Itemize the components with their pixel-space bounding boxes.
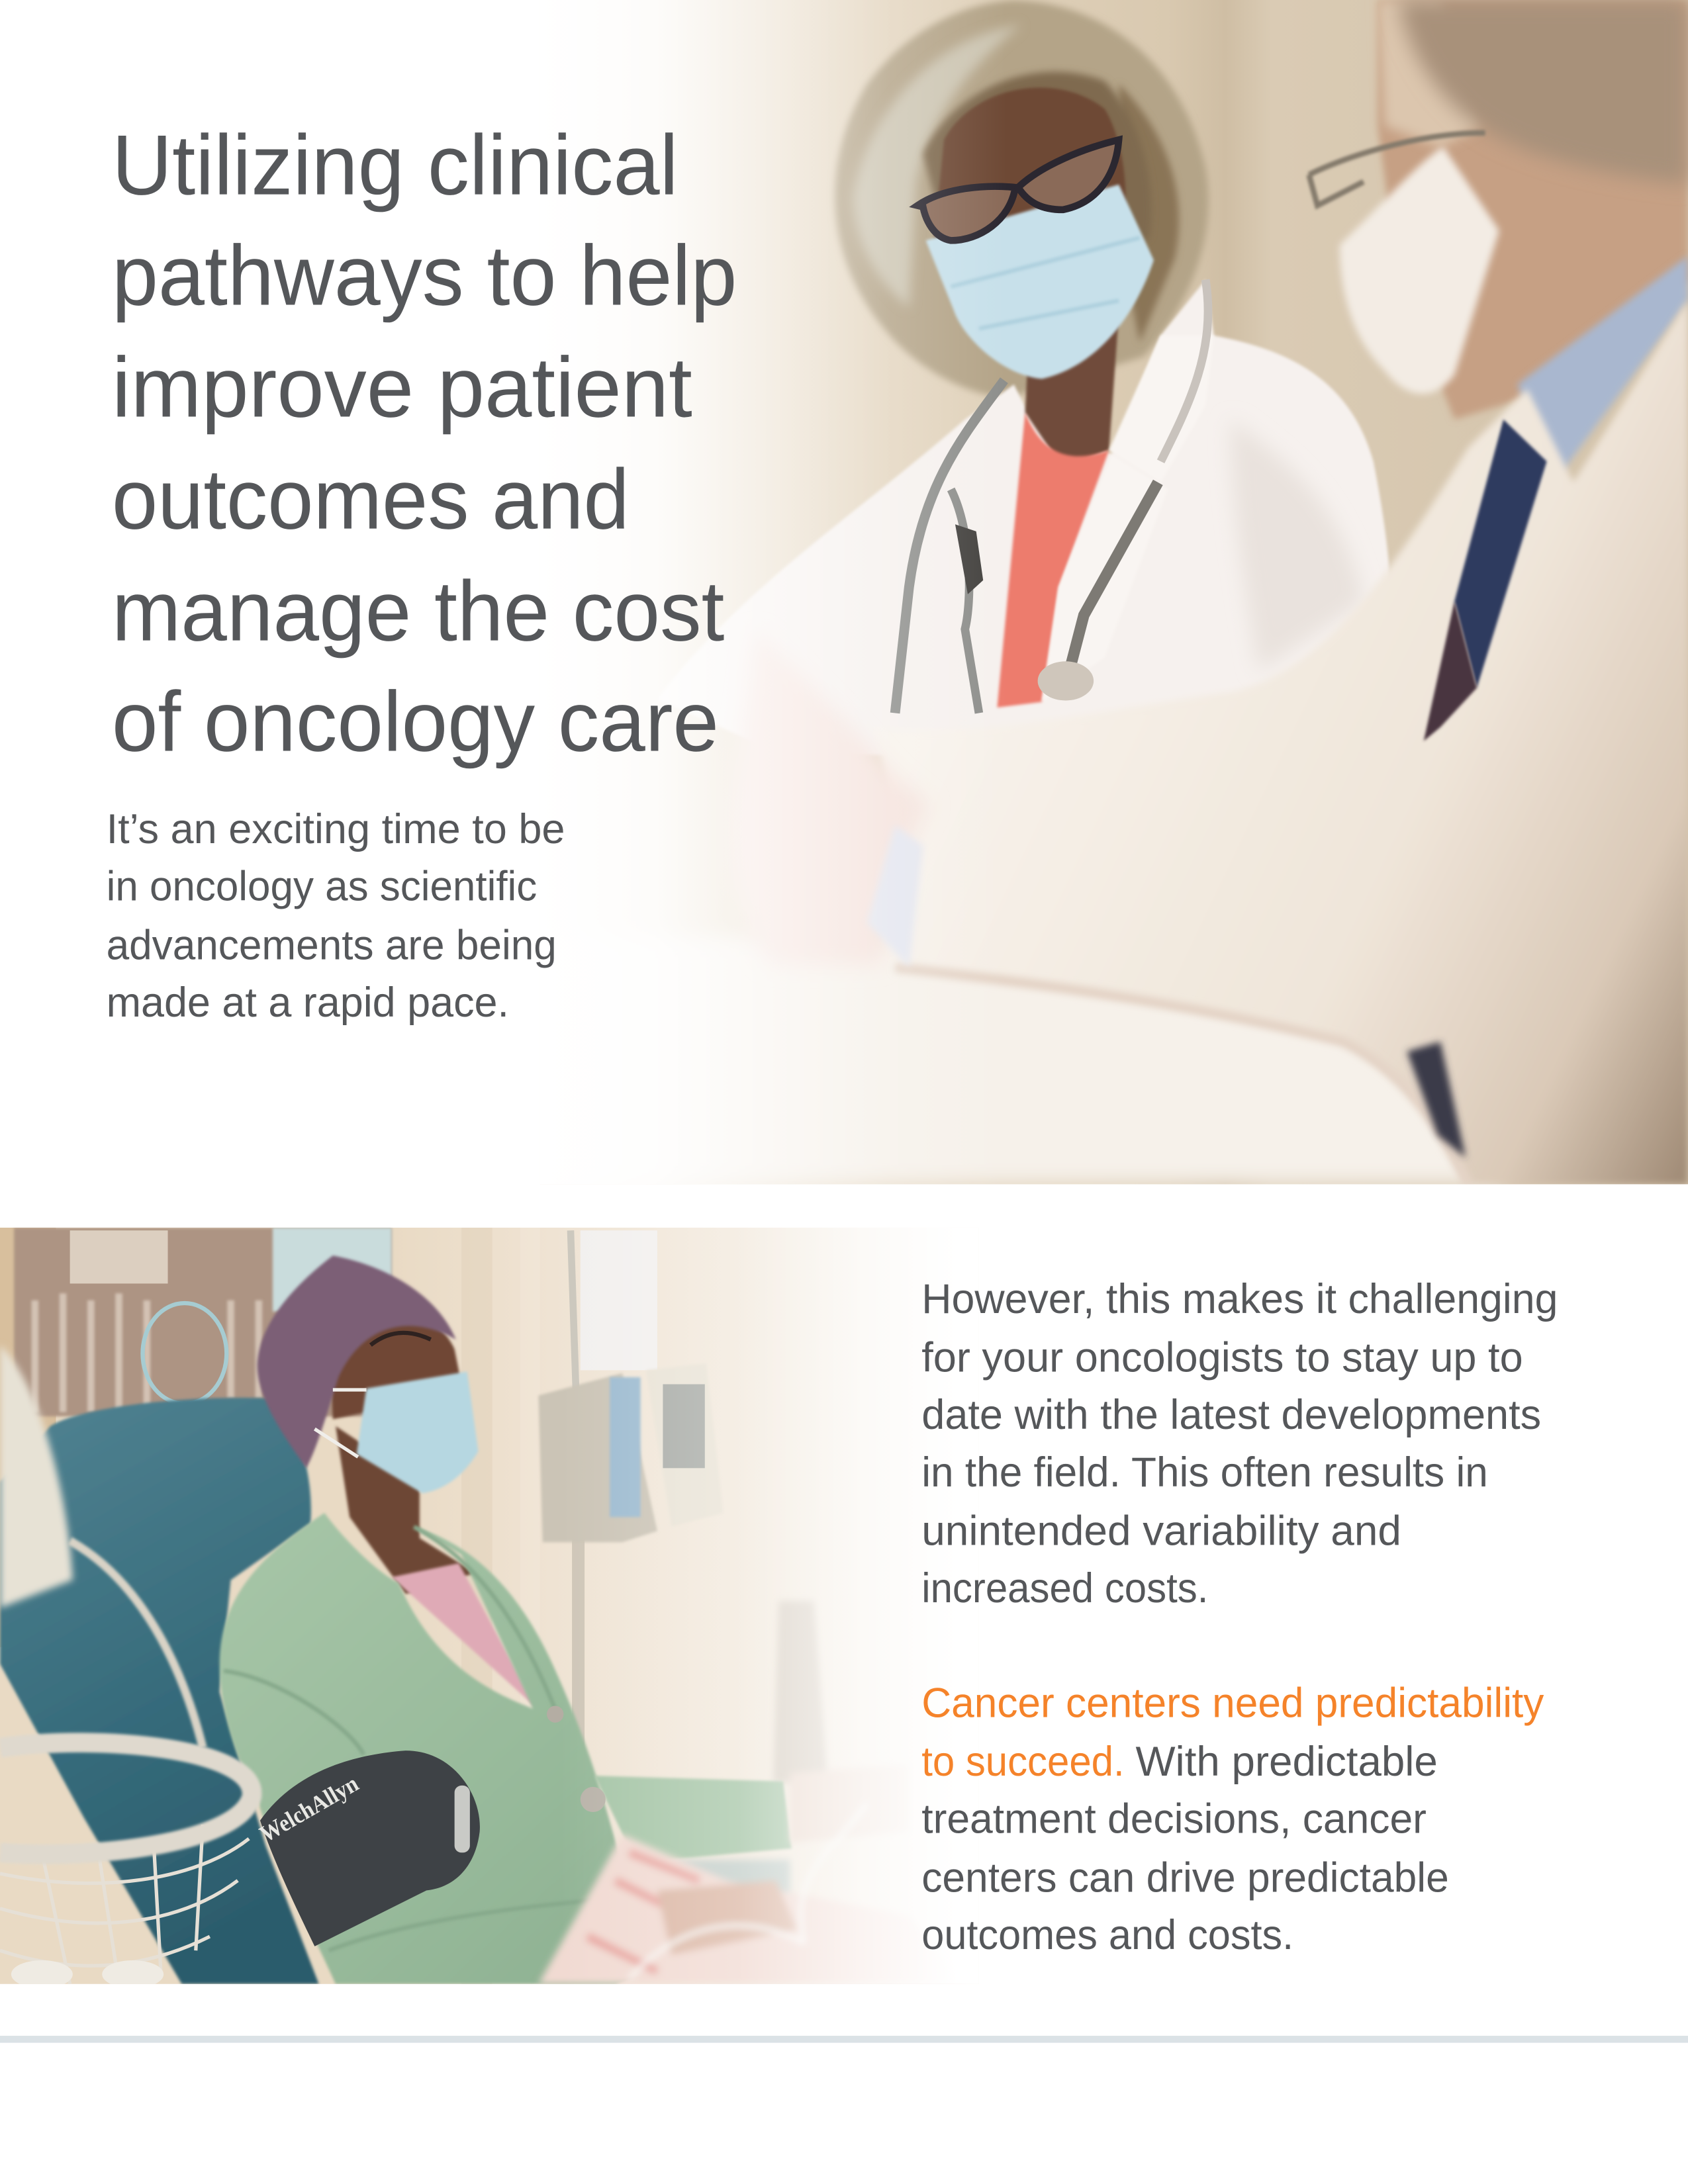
necktie [1454, 420, 1547, 688]
coat and sleeve [874, 300, 1688, 1184]
blood pressure cuff [255, 1751, 480, 1946]
lab coat [657, 280, 1393, 755]
infusion pump [538, 1363, 723, 1542]
hair behind face [919, 68, 1149, 236]
hand [657, 1881, 797, 1955]
glasses [1309, 133, 1485, 206]
title: outcomes and [112, 452, 630, 547]
hair [835, 0, 1209, 398]
woman doctor [657, 0, 1393, 755]
cuff body [260, 1751, 480, 1946]
armrest lamp [0, 1345, 73, 1608]
necktie end under arm [1407, 1042, 1466, 1158]
left wall [0, 1228, 56, 1647]
body text: challenge: increased costs. [921, 1565, 1208, 1612]
table [532, 936, 1503, 1184]
tubing [630, 1803, 867, 1978]
neck [336, 1426, 475, 1594]
picture sky [273, 1228, 392, 1312]
wire basket [0, 1743, 252, 1988]
intro text: made at a rapid pace. [107, 979, 509, 1026]
sleeve shadow edge [895, 968, 1468, 1184]
body text: challenge [921, 1276, 1558, 1612]
stethoscope [895, 280, 1208, 713]
title [112, 118, 737, 770]
shirt [1517, 256, 1688, 475]
cardigan [220, 1513, 665, 1984]
mask pleats [951, 238, 1140, 328]
basket wires [0, 1825, 249, 1984]
coat lapel [1042, 336, 1214, 702]
title: Utilizing clinical [112, 118, 679, 213]
intro text [107, 806, 565, 1026]
neck [1023, 326, 1120, 459]
picture texture [35, 1293, 259, 1412]
body text: predictability: Cancer centers need predictability [921, 1680, 1544, 1726]
body text: predictability: With predictable [1135, 1739, 1438, 1785]
monitor [646, 1363, 723, 1527]
t-shirt [392, 1563, 537, 1709]
curtain folds [461, 1228, 539, 1984]
title: manage the cost [112, 564, 724, 659]
title: of oncology care [112, 674, 719, 770]
chair [0, 1398, 319, 1984]
intro text: advancements are being [107, 922, 557, 968]
body text: challenge: However, this makes it challenging [921, 1276, 1558, 1322]
chest piece [1038, 661, 1094, 700]
body text: predictability [921, 1680, 1544, 1958]
body text: predictability: treatment decisions, cancer [921, 1796, 1427, 1843]
far hand [790, 1764, 909, 1843]
shirt [997, 412, 1109, 707]
head scarf [258, 1255, 456, 1468]
cuff tab [455, 1786, 470, 1852]
face mask [357, 1372, 479, 1493]
hair highlights [853, 25, 1021, 308]
divider [0, 2036, 1688, 2043]
intro text: It’s an exciting time to be [107, 806, 565, 852]
shirt cuff [867, 825, 923, 968]
body text: predictability: to succeed. [921, 1739, 1125, 1785]
pump label [610, 1377, 641, 1517]
cardigan sleeve [594, 1776, 792, 1862]
hair shadow [1119, 84, 1179, 343]
title: improve patient [112, 340, 692, 435]
eye brow [371, 1333, 431, 1345]
cardigan folds [224, 1527, 657, 1950]
fade to white [559, 1228, 979, 1984]
pale forehead [1378, 0, 1482, 147]
cuff brand: WelchAllyn [255, 1770, 363, 1847]
coat shading [1231, 431, 1361, 662]
beach sign [70, 1230, 168, 1283]
basket rim [0, 1743, 252, 1854]
IV pole [572, 1531, 585, 1797]
pump body [538, 1373, 657, 1542]
patient [220, 1255, 792, 1984]
wall background [0, 1228, 979, 1984]
intro text: in oncology as scientific [107, 864, 537, 910]
basket contents [11, 1960, 73, 1988]
mask [1340, 147, 1499, 394]
beach picture [14, 1228, 392, 1416]
face [328, 1309, 464, 1419]
blanket stripes [587, 1852, 699, 1972]
photo: two doctors in masks talking at a table [532, 0, 1688, 1184]
body text: predictability: outcomes and costs. [921, 1912, 1293, 1958]
chair tray arm [70, 1541, 203, 1748]
photo: patient in infusion chair wearing cardigan and blood pressure cuff [0, 1228, 979, 1988]
bicycle [142, 1303, 226, 1404]
mask straps [314, 1390, 367, 1457]
body text: challenge: date with the latest developments [921, 1392, 1541, 1438]
hands and blanket [538, 1764, 965, 1984]
man doctor [874, 0, 1688, 1184]
body text: predictability: centers can drive predictable [921, 1854, 1449, 1901]
picture frame [14, 1228, 392, 1416]
screen [663, 1385, 705, 1468]
wall background [532, 0, 1688, 1184]
window [581, 1230, 657, 1370]
bottle [773, 1601, 828, 1783]
title: pathways to help [112, 228, 737, 324]
cardigan buttons [547, 1706, 563, 1723]
blanket [538, 1835, 965, 1984]
hair [1399, 0, 1688, 185]
face [933, 87, 1127, 240]
blurred hand [731, 629, 930, 965]
glasses [917, 140, 1119, 240]
sleeve shadow [650, 1860, 790, 1909]
fade to white [532, 0, 1007, 1184]
body text: challenge: for your oncologists to stay up to [921, 1335, 1523, 1381]
stethoscope clip [955, 524, 983, 594]
body text: challenge: unintended variability and [921, 1508, 1401, 1555]
shirt sliver [1424, 601, 1477, 741]
body text: challenge: in the field. This often results in [921, 1449, 1488, 1496]
mask [926, 185, 1154, 379]
head [1378, 0, 1688, 420]
IV line [571, 1230, 576, 1398]
